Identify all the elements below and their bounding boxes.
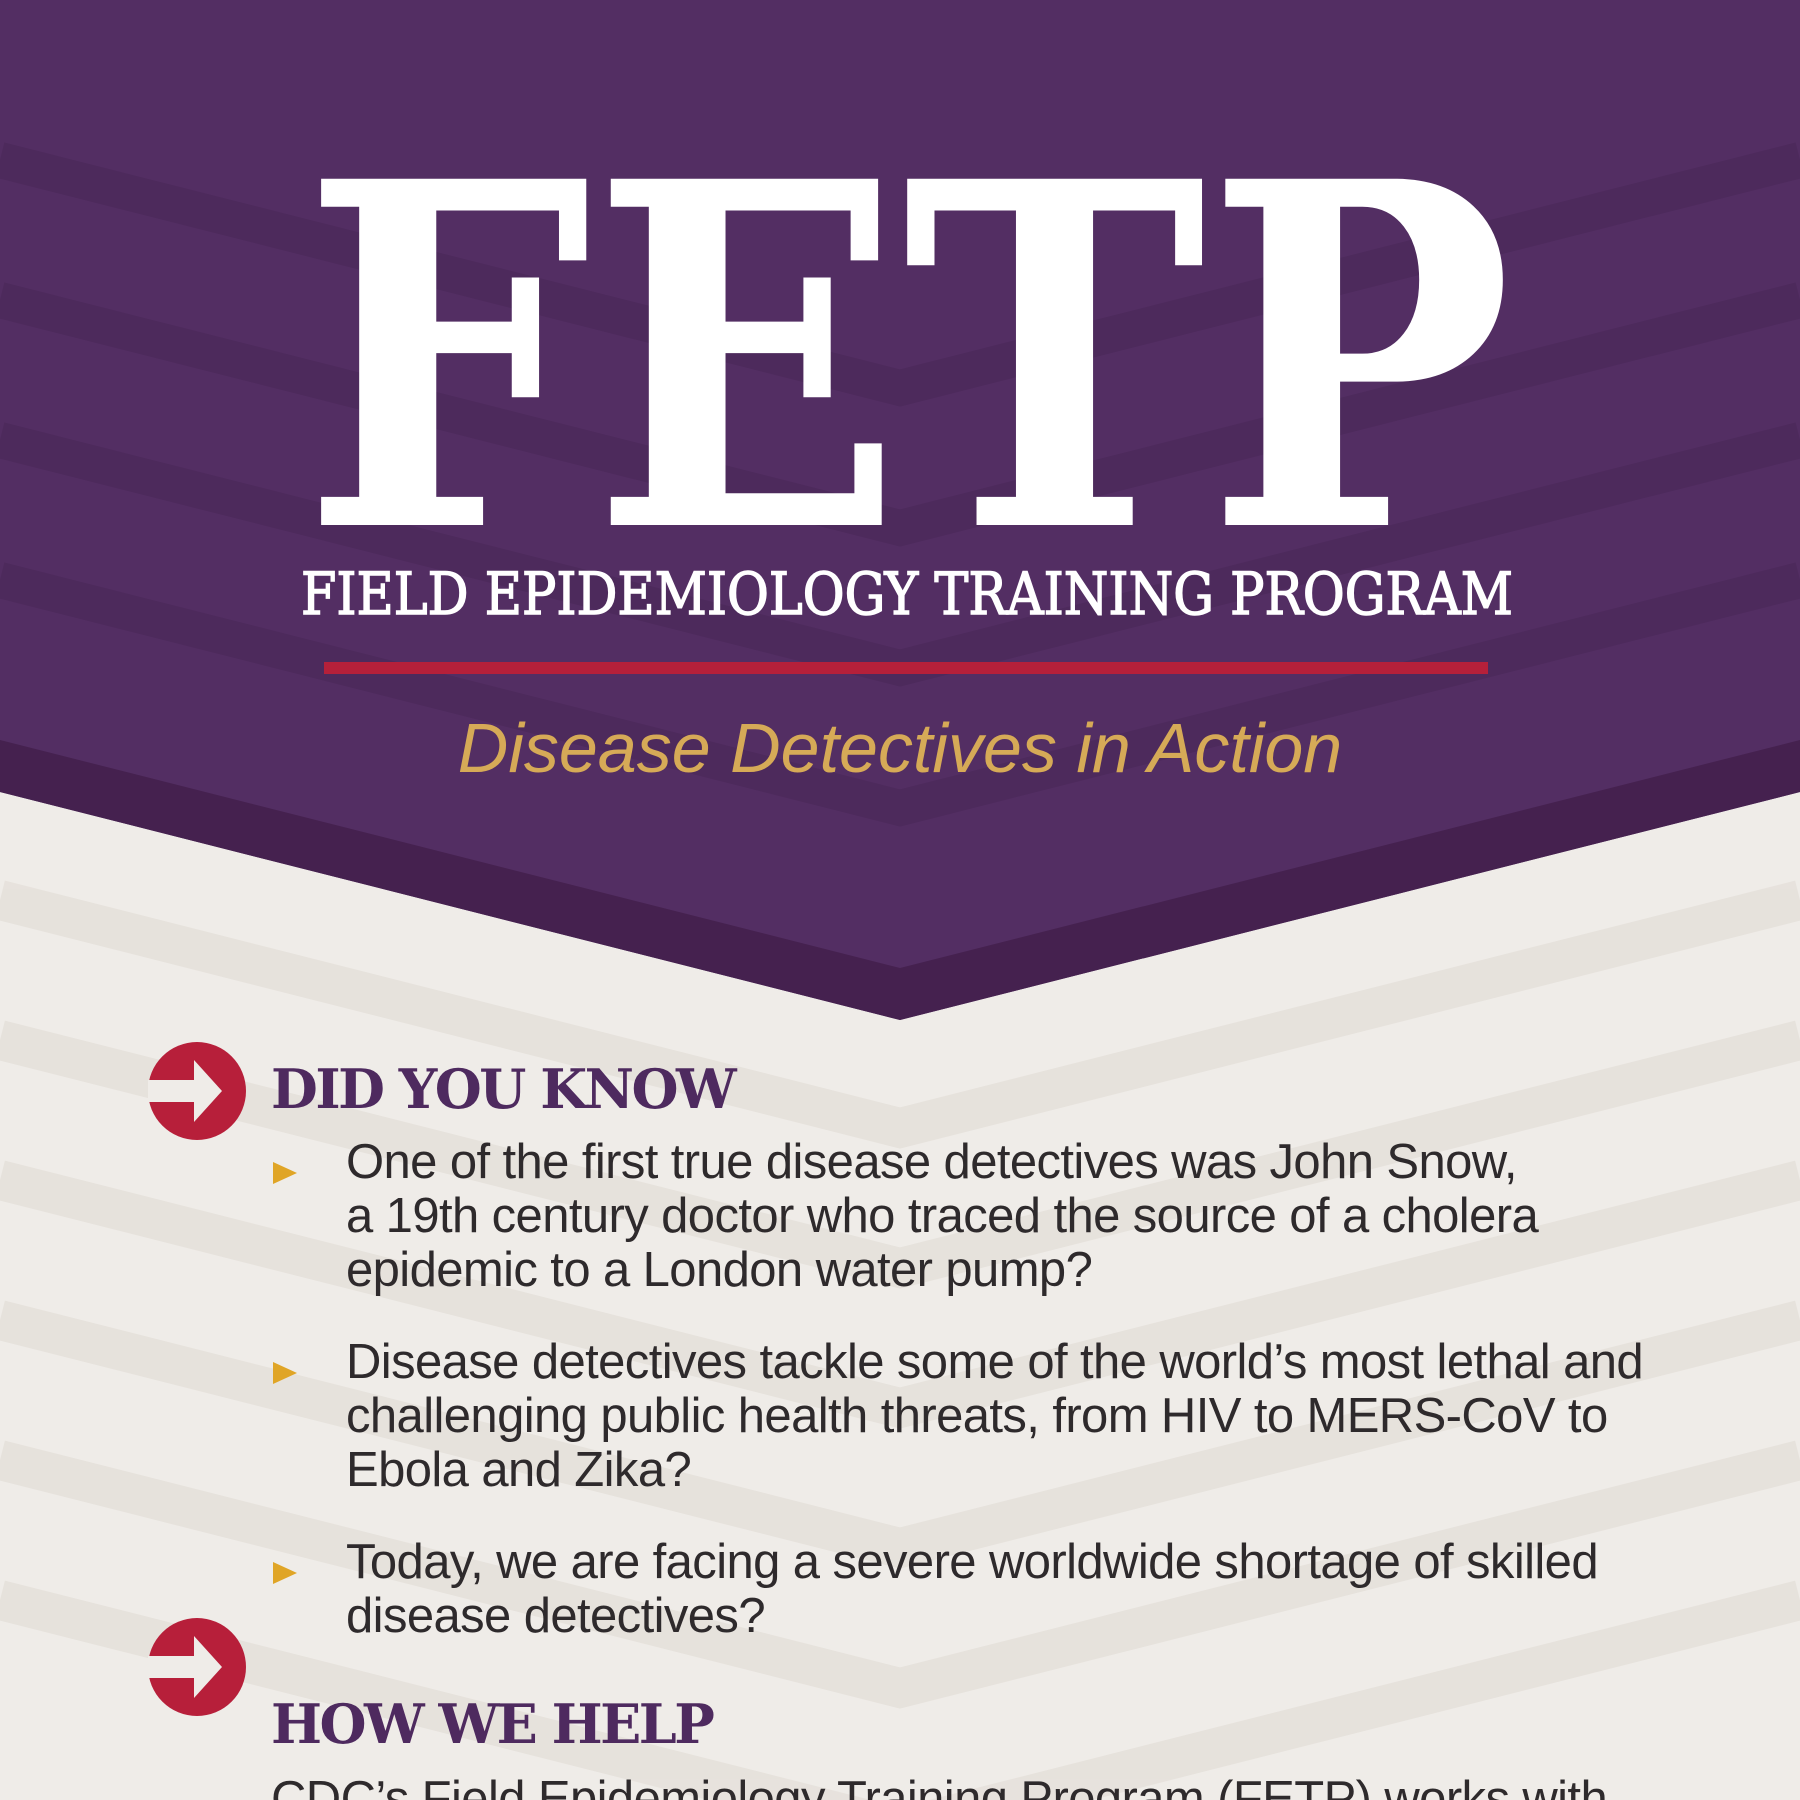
subtitle: FIELD EPIDEMIOLOGY TRAINING PROGRAM	[301, 560, 1513, 628]
bullet 2: challenging public health threats, from HIV to MERS-CoV to	[346, 1389, 1608, 1443]
icon: arrow circle 1	[148, 1042, 246, 1140]
tagline: Disease Detectives in Action	[458, 709, 1342, 787]
heading: did you know: DID YOU KNOW	[271, 1057, 734, 1121]
icon: arrow circle 2	[148, 1618, 246, 1716]
bullet 3	[273, 1535, 1598, 1643]
bullet 3: disease detectives?	[346, 1589, 765, 1643]
bullet 2: Ebola and Zika?	[346, 1443, 691, 1497]
title: FETP: FETP	[302, 80, 1513, 638]
bullet 1: a 19th century doctor who traced the source of a cholera	[346, 1189, 1538, 1243]
bullet 1: One of the first true disease detectives was John Snow,	[346, 1135, 1517, 1189]
bullet 2	[273, 1335, 1643, 1497]
red divider line	[324, 662, 1488, 674]
bullet 2: Disease detectives tackle some of the world’s most lethal and	[346, 1335, 1643, 1389]
heading: how we help: HOW WE HELP	[271, 1692, 712, 1756]
bullet 3: Today, we are facing a severe worldwide shortage of skilled	[346, 1535, 1598, 1589]
bullet 1	[273, 1135, 1539, 1297]
bullet 1: epidemic to a London water pump?	[346, 1243, 1092, 1297]
